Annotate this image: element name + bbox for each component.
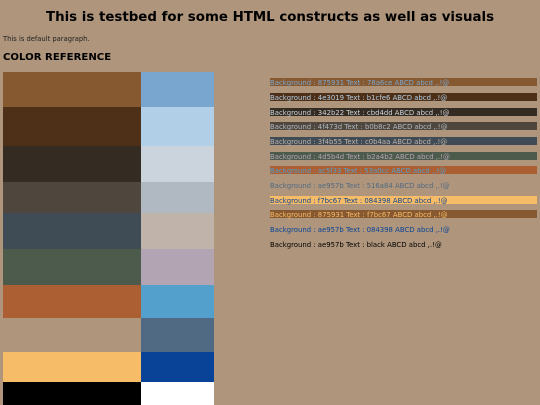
section heading: COLOR REFERENCE [3,52,111,63]
panel: text samples: Background : ae957b Text : 516a84 ABCD abcd ,.!@ [270,182,450,190]
panel: text samples: Background : 4d5b4d Text : b2a4b2 ABCD abcd ,.!@ [270,153,450,161]
panel: color swatches [3,72,214,405]
default paragraph: This is default paragraph. [3,35,90,43]
panel: text samples: Background : ac5f33 Text : 53a0cc ABCD abcd ,.!@ [270,167,446,175]
panel: text samples: Background : 4e3019 Text : b1cfe6 ABCD abcd ,.!@ [270,94,447,102]
panel: text samples [270,78,537,249]
panel: text samples: Background : ae957b Text : black ABCD abcd ,.!@ [270,241,442,249]
panel: text samples: Background : 3f4b55 Text : c0b4aa ABCD abcd ,.!@ [270,138,447,146]
panel: text samples: Background : 4f473d Text : b0b8c2 ABCD abcd ,.!@ [270,123,447,131]
panel: text samples: Background : f7bc67 Text : 084398 ABCD abcd ,.!@ [270,197,447,205]
panel: text samples: Background : 342b22 Text : cbd4dd ABCD abcd ,.!@ [270,109,449,117]
panel: text samples: Background : 875931 Text : 78a6ce ABCD abcd ,.!@ [270,79,449,87]
panel: text samples: Background : ae957b Text : 084398 ABCD abcd ,.!@ [270,226,450,234]
title: This is testbed for some HTML constructs as well as visuals [46,10,494,25]
panel: text samples: Background : 875931 Text : f7bc67 ABCD abcd ,.!@ [270,211,447,219]
